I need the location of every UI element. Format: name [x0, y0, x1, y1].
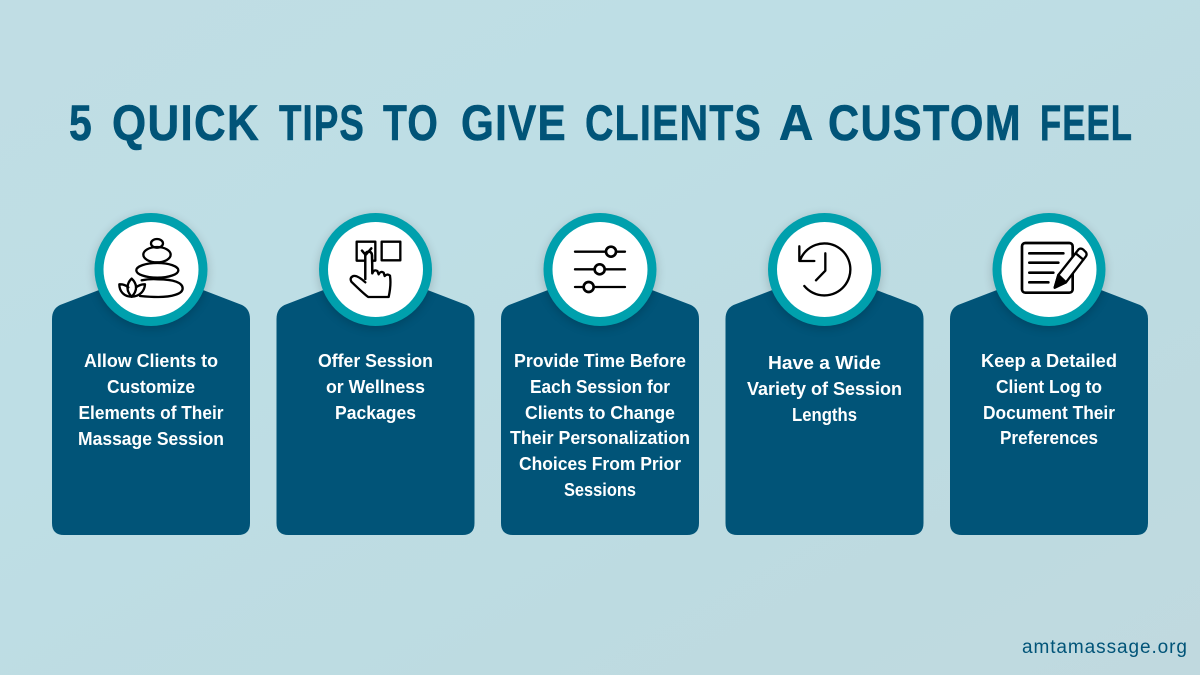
tip 4 text [747, 353, 902, 425]
title: A [779, 95, 813, 151]
title: GIVE [461, 95, 567, 151]
title: CUSTOM [828, 95, 1022, 151]
tip 5 text [981, 351, 1117, 448]
tip 4 text: Have a Wide [768, 353, 881, 373]
tip 1 text: Elements of Their [78, 403, 224, 423]
icon: sliders [575, 247, 625, 292]
tip 3 text [510, 351, 690, 500]
tip 1 text [78, 351, 224, 449]
tip 2 text: Packages [335, 403, 416, 423]
icon ring 2 [319, 213, 432, 328]
tip 3 text: Their Personalization [510, 428, 690, 448]
icon ring 4 [768, 213, 881, 328]
icon: notepad and pencil [1022, 243, 1087, 293]
tip 3 text: Each Session for [530, 377, 670, 397]
tip 2 text [318, 351, 433, 423]
icon: stacked stones with lotus [119, 239, 183, 297]
title: TIPS [279, 95, 365, 151]
panel: tip 5 [950, 213, 1148, 535]
icon ring 3 [544, 213, 656, 328]
title: QUICK [112, 95, 260, 151]
tip 5 text: Document Their [983, 403, 1115, 423]
panel: tip 3 [501, 213, 699, 535]
tip 3 text: Clients to Change [525, 403, 675, 423]
tip 3 text: Sessions [564, 480, 636, 500]
card 1 background [52, 270, 250, 535]
panel: tip 4 [726, 213, 924, 535]
card 5 background [950, 270, 1148, 535]
title: 5 [69, 95, 93, 151]
tip 4 text: Lengths [792, 405, 857, 425]
title: FEEL [1040, 95, 1133, 151]
tip 2 text: Offer Session [318, 351, 433, 371]
icon: clock with counter-clockwise arrow [799, 243, 850, 295]
tip 4 text: Variety of Session [747, 379, 902, 399]
tip 5 text: Client Log to [996, 377, 1102, 397]
title: CLIENTS [585, 95, 762, 151]
icon: hand selecting checkbox [351, 242, 400, 297]
tip 3 text: Provide Time Before [514, 351, 686, 371]
tip 5 text: Preferences [1000, 428, 1098, 448]
title: TO [383, 95, 439, 151]
tip 3 text: Choices From Prior [519, 454, 681, 474]
tip 1 text: Massage Session [78, 429, 224, 449]
card 2 background [276, 270, 474, 535]
icon ring 1 [94, 213, 208, 328]
panel: tip 1 [52, 213, 250, 535]
tip 1 text: Customize [107, 377, 195, 397]
website footer: amtamassage.org [1022, 637, 1187, 658]
card 3 background [501, 270, 699, 535]
tip 2 text: or Wellness [326, 377, 425, 397]
icon ring 5 [992, 213, 1106, 328]
tip 1 text: Allow Clients to [84, 351, 218, 371]
tip 5 text: Keep a Detailed [981, 351, 1117, 371]
card 4 background [726, 270, 924, 535]
panel: tip 2 [276, 213, 474, 535]
